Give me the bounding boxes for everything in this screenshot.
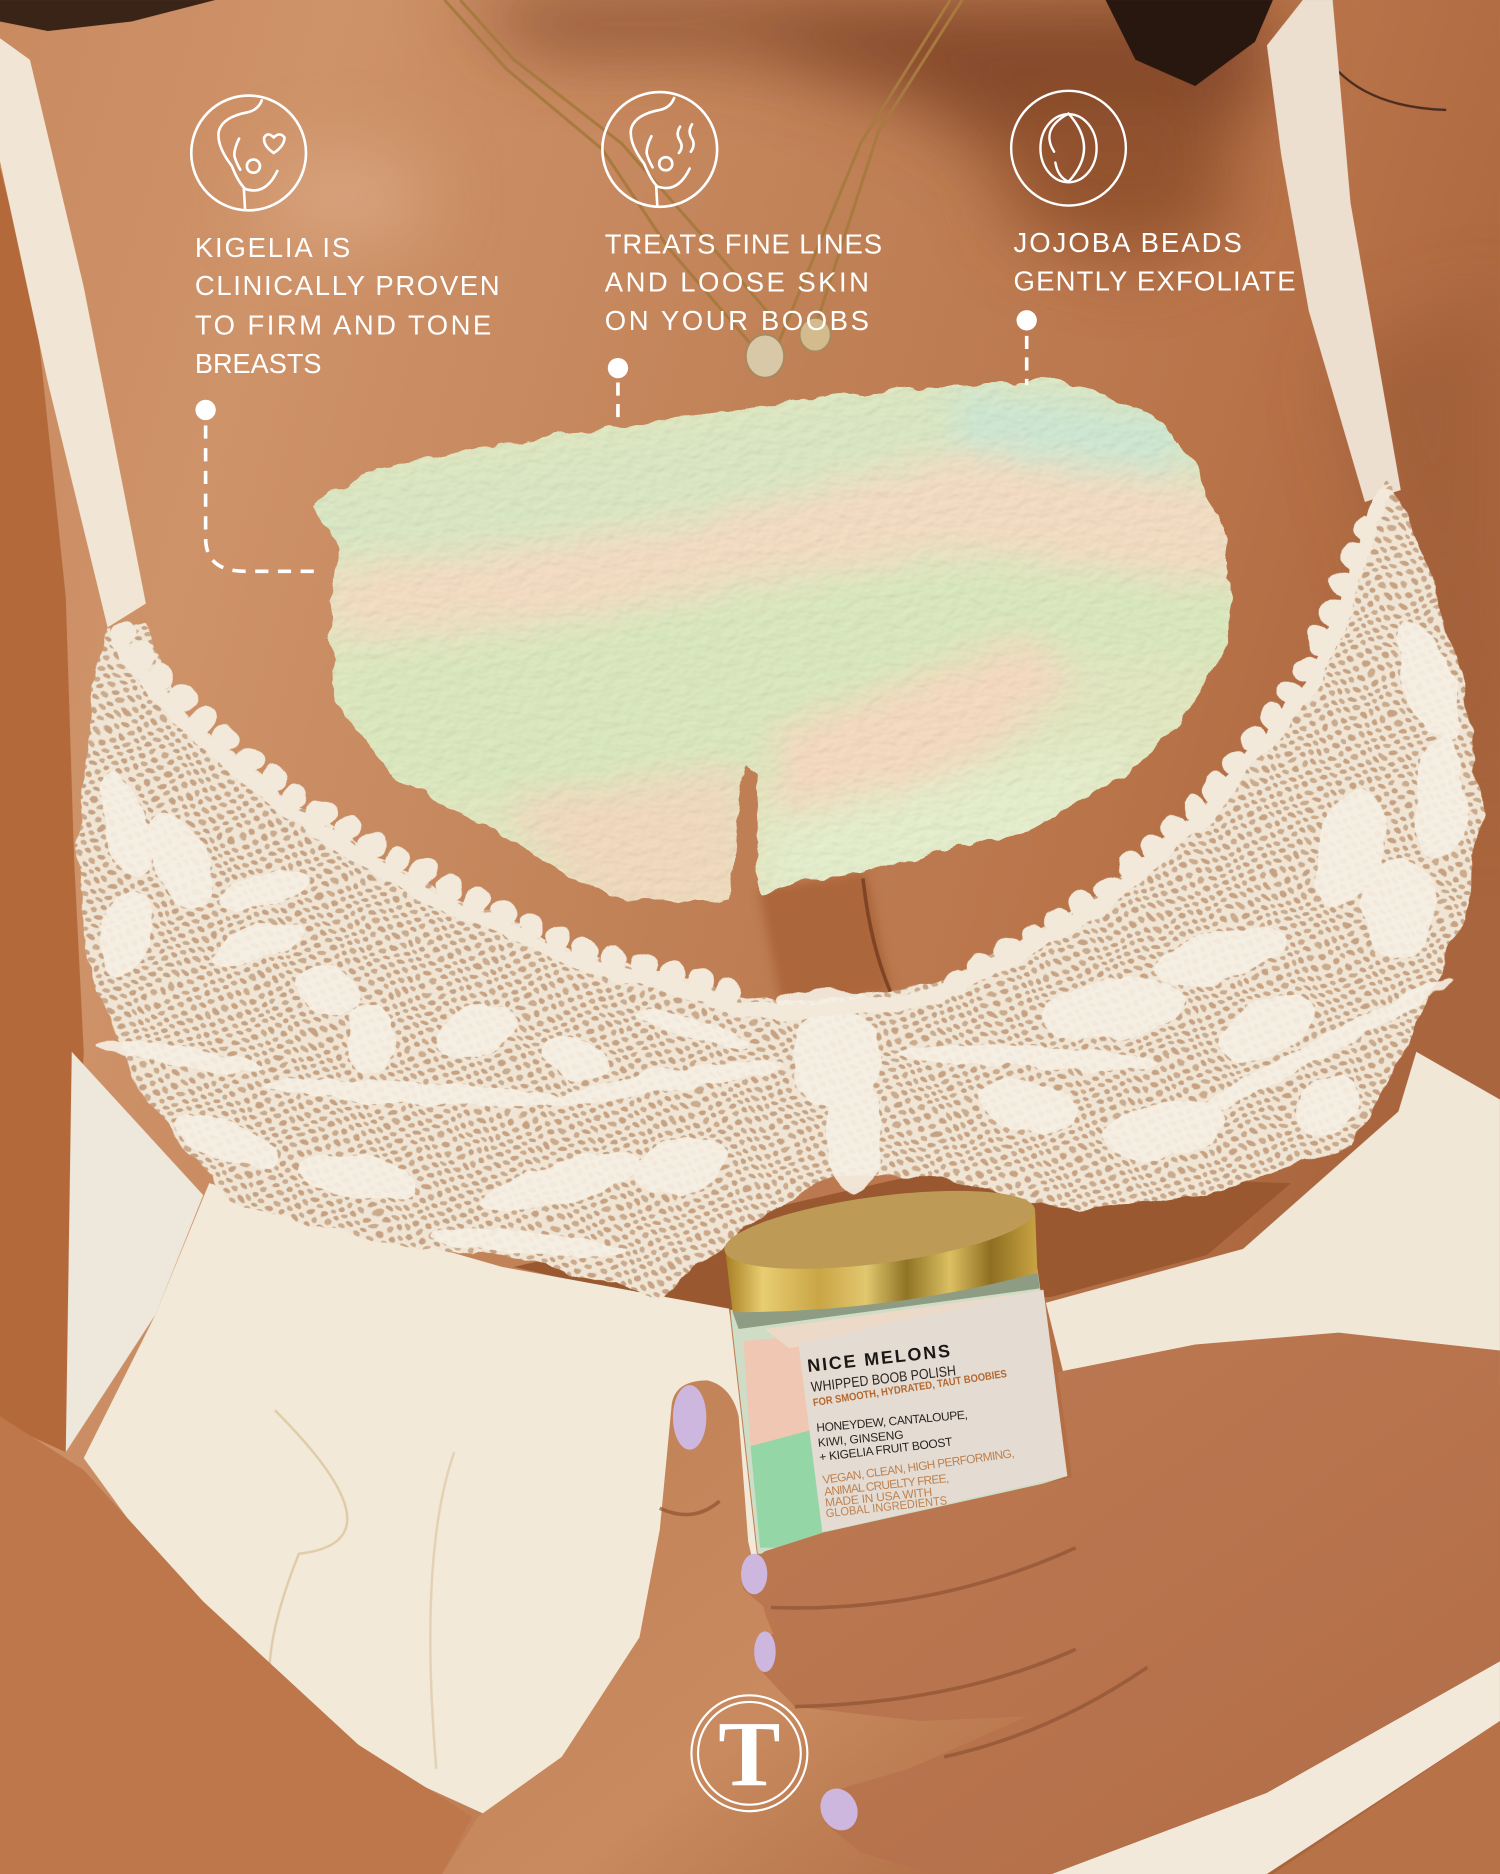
jar label: HONEYDEW, CANTALOUPE, (816, 1408, 968, 1435)
cleavage shadow (759, 872, 890, 1010)
text block: AND LOOSE SKIN (605, 267, 869, 298)
skin between bra and waist (514, 1171, 1291, 1315)
lilac nails (673, 1385, 864, 1837)
jar label (798, 1290, 1067, 1532)
jar label: NICE MELONS (806, 1341, 951, 1376)
jar label: WHIPPED BOOB POLISH (810, 1363, 957, 1396)
jar label: KIWI, GINSENG (817, 1428, 904, 1450)
brand logo (691, 1695, 807, 1811)
hair at the top edges (0, 0, 1446, 110)
lace bra (78, 478, 1482, 1297)
text block: CLINICALLY PROVEN (195, 270, 500, 301)
text block: JOJOBA BEADS (1014, 227, 1242, 258)
text block: TO FIRM AND TONE (195, 310, 491, 341)
finger creases (660, 1501, 1147, 1757)
icon: body with wavy lines (602, 92, 717, 207)
jar label: + KIGELIA FRUIT BOOST (819, 1435, 954, 1464)
text block: ON YOUR BOOBS (605, 305, 869, 336)
callout: jojoba beads (1011, 91, 1296, 385)
left bra strap (0, 38, 146, 627)
jar label: MADE IN USA WITH (824, 1485, 933, 1510)
dashed connector (195, 400, 323, 571)
dashed connector (608, 358, 628, 425)
jar label: ANIMAL CRUELTY FREE, (823, 1471, 950, 1499)
lace florals (91, 611, 1473, 1262)
left arm (0, 1416, 472, 1874)
dashed connector (1017, 310, 1037, 385)
text block (605, 228, 882, 336)
jar gold lid (720, 1176, 1039, 1312)
jar label: FOR SMOOTH, HYDRATED, TAUT BOOBIES (812, 1368, 1008, 1409)
bottom right cloth (1052, 1661, 1500, 1874)
callout: fine lines (602, 92, 882, 425)
text block (1014, 227, 1296, 296)
jar glass and contents (730, 1269, 1067, 1554)
left hand and thumb (442, 1380, 1052, 1874)
jar (720, 1176, 1067, 1554)
text block: KIGELIA IS (195, 232, 350, 263)
jar label: GLOBAL INGREDIENTS (825, 1493, 948, 1520)
text block: BREASTS (195, 348, 322, 379)
text block: TREATS FINE LINES (605, 228, 882, 259)
cream trousers (84, 1052, 1500, 1817)
bottom right skin (1273, 1721, 1500, 1874)
jar label: VEGAN, CLEAN, HIGH PERFORMING, (822, 1446, 1015, 1487)
background linen left (66, 1052, 203, 1452)
brand logo: T (718, 1704, 780, 1807)
icon: body with heart (191, 96, 306, 210)
callout: kigelia (191, 96, 500, 571)
icon: jojoba bead (1011, 91, 1126, 206)
text block (195, 232, 500, 379)
gold necklaces (445, 0, 962, 378)
left side arm shadow (0, 167, 84, 1452)
right hand and fingers (741, 1333, 1500, 1874)
shadows and highlights on chest (263, 0, 1500, 837)
right bra strap (1267, 0, 1401, 502)
cream smear (313, 377, 1234, 903)
text block: GENTLY EXFOLIATE (1014, 265, 1296, 296)
lace scalloped edge (114, 490, 1386, 1016)
